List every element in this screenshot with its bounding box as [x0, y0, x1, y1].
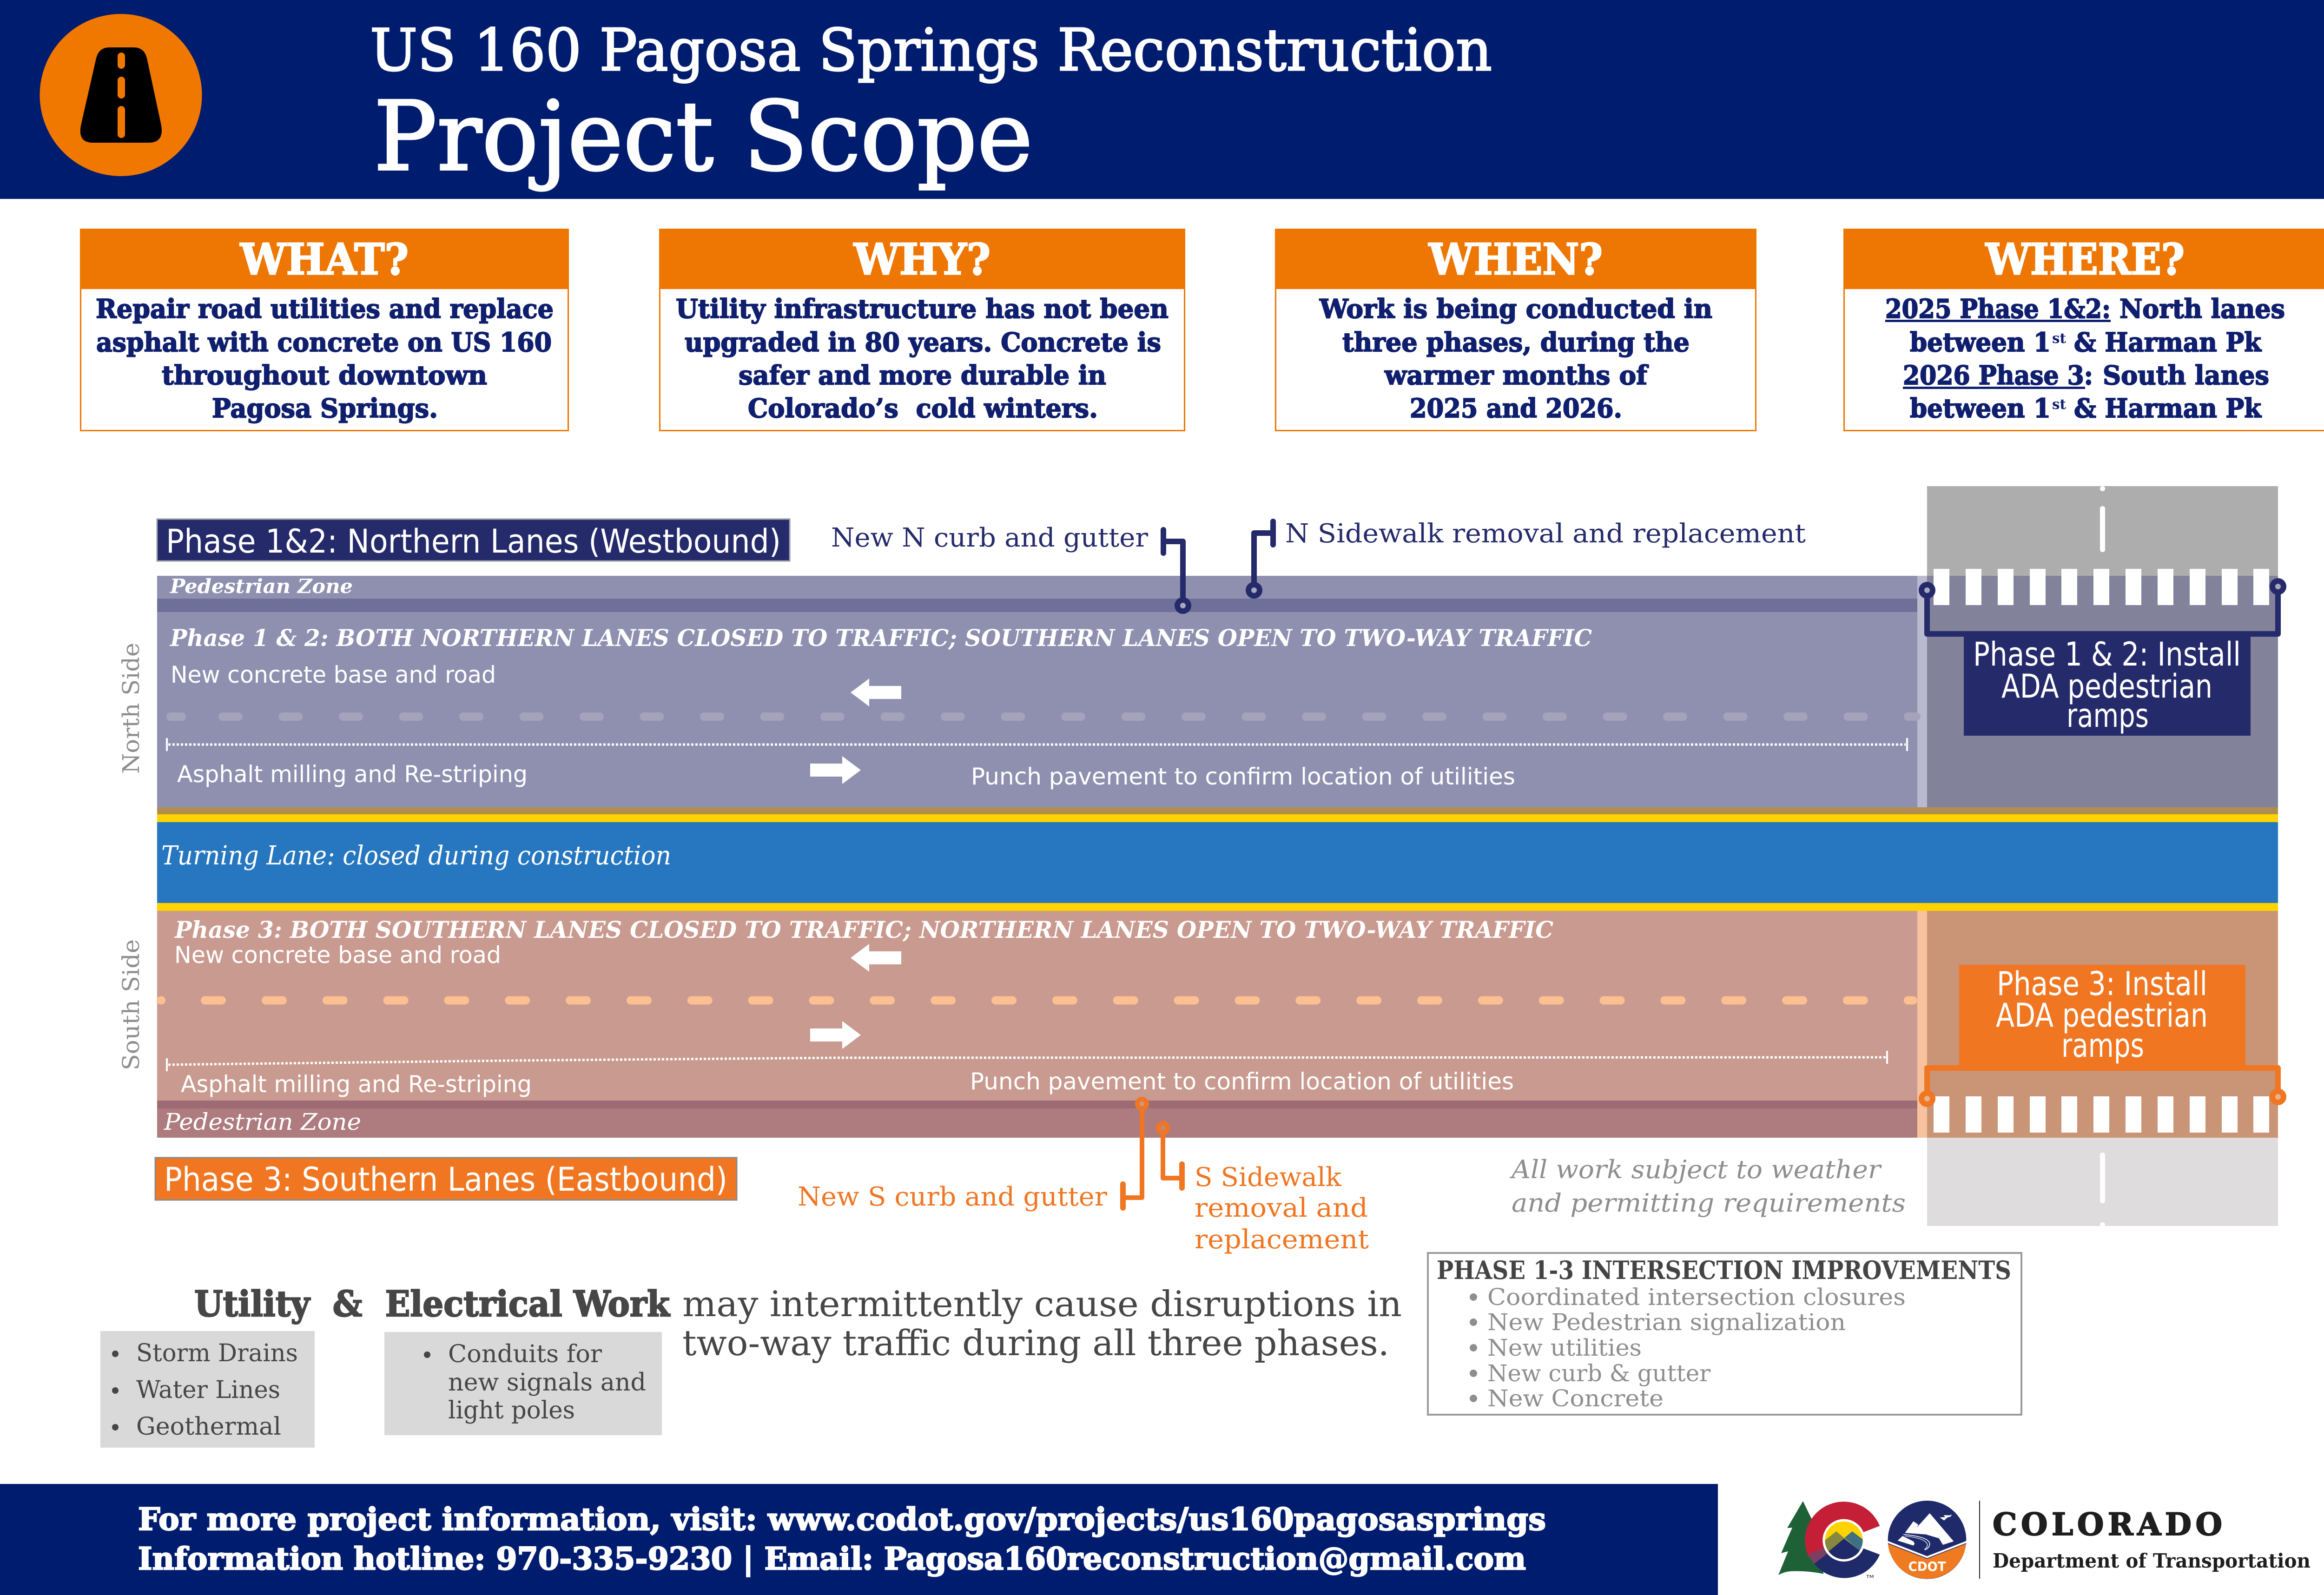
panel: electrical list: new signals and — [448, 1369, 646, 1397]
arrow: westbound south side — [851, 944, 901, 972]
north milling label: Asphalt milling and Re-striping — [177, 761, 528, 788]
panel: what — [80, 229, 569, 430]
label: phase 1&2 northern lanes: Phase 1&2: Northern Lanes (Westbound) — [166, 522, 781, 560]
title — [370, 17, 1492, 192]
why body text: Colorado’s cold winters. — [748, 393, 1098, 424]
intersection list: New Pedestrian signalization — [1487, 1309, 1846, 1336]
why body text: Utility infrastructure has not been — [676, 294, 1169, 324]
north lanes panel — [157, 575, 2278, 807]
where body text: South lanes — [2103, 360, 2269, 391]
side label: south side: South Side — [118, 939, 145, 1070]
text block: utility and electrical work — [194, 1283, 1402, 1364]
logo: CDOT badge — [1888, 1501, 1967, 1579]
where body text: st — [2052, 396, 2066, 413]
when body text: warmer months of — [1384, 360, 1649, 391]
intersection list: Coordinated intersection closures — [1487, 1284, 1906, 1311]
logo: CDOT badge: CDOT — [1908, 1560, 1946, 1574]
note: weather and permitting: and permitting requirements — [1512, 1188, 1906, 1218]
title: US 160 Pagosa Springs Reconstruction — [370, 17, 1492, 84]
footer band: For more project information, visit: www.codot.gov/projects/us160pagosasprings — [138, 1501, 1546, 1537]
logo divider and wordmark: COLORADO — [1993, 1506, 2222, 1542]
where body text: 2025 Phase 1&2: — [1885, 294, 2111, 324]
footer band — [0, 1484, 1718, 1595]
where body text: between 1 — [1910, 393, 2051, 424]
panel: what: WHAT? — [240, 234, 409, 284]
south lanes panel — [157, 911, 2278, 1138]
callout: S sidewalk removal: S Sidewalk — [1195, 1162, 1342, 1193]
callout: new S curb and gutter: New S curb and gutter — [798, 1182, 1107, 1212]
where body text: st — [2052, 330, 2066, 347]
panel: intersection improvements — [1428, 1253, 2021, 1415]
intersection list — [1470, 1284, 1906, 1412]
where body text: North lanes — [2119, 294, 2285, 324]
south punch label: Punch pavement to confirm location of utilities — [970, 1068, 1514, 1095]
why body text — [676, 294, 1169, 424]
callout: N sidewalk removal — [1248, 519, 1806, 596]
intersection list: New curb & gutter — [1487, 1360, 1710, 1387]
south pedestrian zone label: Pedestrian Zone — [164, 1108, 361, 1135]
panel: utility list: Geothermal — [136, 1413, 281, 1441]
panel: when: WHEN? — [1428, 234, 1603, 284]
logo: Colorado C with tree: TM — [1866, 1575, 1874, 1580]
callout: phase 3 ADA ramps — [1921, 965, 2284, 1104]
turning lane: Turning Lane: closed during construction — [161, 841, 671, 871]
turning lane — [157, 807, 2278, 911]
panel: electrical list — [384, 1332, 662, 1435]
where body text: & Harman Pk — [2074, 393, 2262, 424]
icon: road in orange circle — [40, 14, 202, 176]
note: weather and permitting: All work subject to weather — [1509, 1155, 1882, 1184]
panel: electrical list: Conduits for — [448, 1340, 602, 1368]
panel: utility list: Water Lines — [136, 1376, 280, 1404]
logo: Colorado C with tree — [1778, 1501, 1880, 1580]
callout: phase 1 & 2 ADA ramps — [1921, 581, 2284, 736]
panel: why: WHY? — [853, 234, 990, 284]
north pedestrian zone label: Pedestrian Zone — [170, 575, 353, 598]
why body text: safer and more durable in — [739, 360, 1106, 391]
panel: electrical list: light poles — [448, 1397, 575, 1424]
callout: phase 3 ADA ramps: ADA pedestrian — [1996, 996, 2208, 1035]
label: phase 3 southern lanes: Phase 3: Southern Lanes (Eastbound) — [164, 1160, 727, 1199]
when body text: 2025 and 2026. — [1410, 393, 1622, 424]
panel: utility list: Storm Drains — [136, 1339, 298, 1367]
intersection: cross street south — [1927, 1138, 2278, 1227]
arrow: eastbound south side — [810, 1021, 861, 1049]
arrow: eastbound — [810, 756, 861, 784]
callout: new S curb and gutter — [798, 1099, 1147, 1212]
north closure heading: Phase 1 & 2: BOTH NORTHERN LANES CLOSED TO TRAFFIC; SOUTHERN LANES OPEN TO TWO-WAY TRAFFIC — [169, 624, 1592, 652]
title: Project Scope — [374, 81, 1033, 192]
south concrete label: New concrete base and road — [174, 942, 501, 969]
why body text: upgraded in 80 years. Concrete is — [685, 327, 1161, 358]
road diagram — [118, 486, 2284, 1255]
callout: phase 3 ADA ramps: Phase 3: Install — [1997, 965, 2207, 1003]
when body text: three phases, during the — [1342, 327, 1690, 358]
crosswalk south — [1934, 1096, 2269, 1133]
callout: phase 1 & 2 ADA ramps: Phase 1 & 2: Install — [1973, 635, 2241, 673]
logo divider and wordmark: Department of Transportation — [1993, 1549, 2311, 1572]
arrow: westbound — [851, 679, 901, 706]
crosswalk north — [1934, 569, 2269, 605]
callout: S sidewalk removal — [1158, 1123, 1369, 1255]
what body text: asphalt with concrete on US 160 — [96, 327, 552, 358]
intersection: cross street north — [1927, 486, 2278, 576]
logo divider and wordmark — [1979, 1501, 2311, 1579]
callout: phase 1 & 2 ADA ramps: ADA pedestrian — [2001, 667, 2212, 705]
south milling label: Asphalt milling and Re-striping — [181, 1071, 532, 1098]
footer band: Information hotline: 970-335-9230 | Email: Pagosa160reconstruction@gmail.com — [138, 1541, 1526, 1577]
panel: where — [1843, 229, 2324, 430]
side label: north side: North Side — [118, 643, 145, 774]
what body text — [96, 294, 554, 424]
text block: utility and electrical work: Utility & Electrical Work — [194, 1283, 670, 1325]
where body text: 2026 Phase 3: — [1903, 360, 2093, 391]
panel: why — [659, 229, 1185, 430]
south closure heading: Phase 3: BOTH SOUTHERN LANES CLOSED TO TRAFFIC; NORTHERN LANES OPEN TO TWO-WAY TRAFFIC — [174, 916, 1553, 943]
callout: S sidewalk removal: removal and — [1195, 1193, 1368, 1223]
note: weather and permitting — [1509, 1155, 1906, 1218]
callout: phase 3 ADA ramps: ramps — [2061, 1027, 2144, 1065]
what body text: Repair road utilities and replace — [96, 294, 554, 324]
text block: utility and electrical work: may intermittently cause disruptions in — [682, 1283, 1402, 1325]
when body text: Work is being conducted in — [1319, 294, 1712, 324]
panel: utility list — [100, 1331, 315, 1448]
what body text: Pagosa Springs. — [212, 393, 438, 424]
where body text: between 1 — [1910, 327, 2051, 358]
callout: new N curb and gutter — [831, 523, 1188, 611]
when body text — [1319, 294, 1712, 424]
callout: S sidewalk removal: replacement — [1195, 1225, 1369, 1255]
panel: where: WHERE? — [1985, 234, 2185, 284]
callout: phase 1 & 2 ADA ramps: ramps — [2067, 697, 2149, 735]
north punch label: Punch pavement to confirm location of utilities — [971, 763, 1515, 790]
intersection heading: PHASE 1-3 INTERSECTION IMPROVEMENTS — [1437, 1255, 2011, 1285]
panel: when — [1275, 229, 1756, 430]
what body text: throughout downtown — [162, 360, 487, 391]
header band — [0, 0, 2324, 199]
text block: utility and electrical work: two-way traffic during all three phases. — [682, 1322, 1389, 1364]
intersection list: New Concrete — [1487, 1385, 1664, 1412]
where body text: & Harman Pk — [2074, 327, 2262, 358]
north concrete label: New concrete base and road — [171, 661, 496, 688]
callout: N sidewalk removal: N Sidewalk removal and replacement — [1285, 519, 1806, 549]
where body text — [1885, 294, 2285, 424]
intersection list: New utilities — [1487, 1334, 1642, 1361]
callout: new N curb and gutter: New N curb and gutter — [831, 523, 1148, 553]
